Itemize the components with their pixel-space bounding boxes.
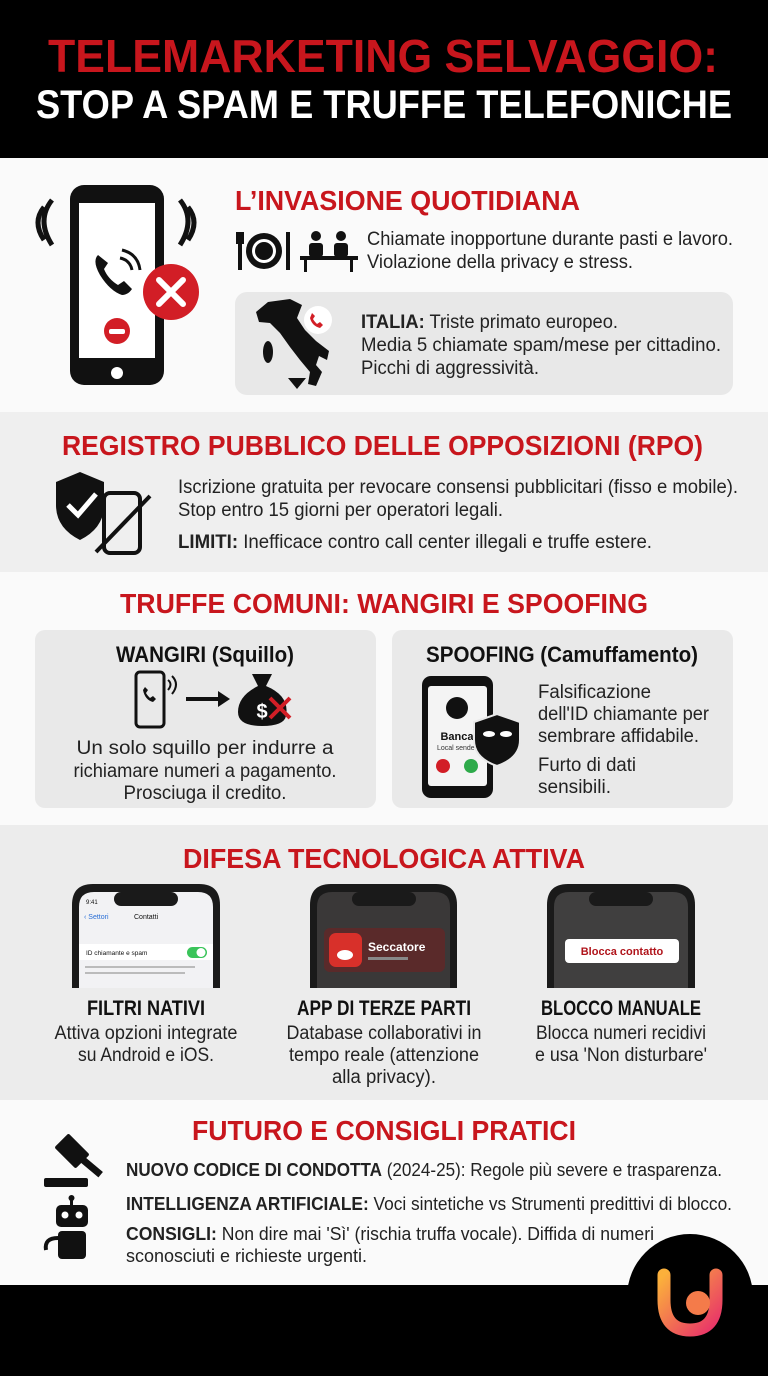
text: app terze parti [286, 997, 482, 1088]
callout: italia: Picchi di aggressività. [361, 358, 539, 379]
panel: futuro e consigli: CONSIGLI: Non dire mai 'Sì' (rischia truffa vocale). Diffida di numeri [126, 1224, 654, 1244]
card: spoofing: Furto di dati [538, 755, 636, 776]
text: futuro: NUOVO CODICE DI CONDOTTA (2024-25): Regole più severe e trasparenza. [126, 1160, 722, 1180]
text: filtri nativi [54, 997, 238, 1066]
icon: dinner and work [236, 231, 358, 272]
phone: blocco manuale: Blocca contatto [581, 946, 664, 958]
text: blocco manuale: BLOCCO MANUALE [541, 997, 701, 1020]
text: app terze parti: tempo reale (attenzione [289, 1045, 479, 1066]
card: wangiri: richiamare numeri a pagamento. [74, 761, 336, 782]
text: blocco manuale: e usa 'Non disturbare' [535, 1045, 707, 1066]
heading: L’INVASIONE QUOTIDIANA [235, 185, 580, 216]
text: filtri nativi: FILTRI NATIVI [87, 997, 205, 1020]
card: wangiri: $ [256, 701, 268, 723]
panel: futuro e consigli: INTELLIGENZA ARTIFICIALE: Voci sintetiche vs Strumenti predittivi di blocco. [126, 1194, 732, 1214]
card: wangiri [35, 630, 376, 808]
text: chiamate: Chiamate inopportune durante pasti e lavoro. [367, 229, 733, 250]
card: spoofing: SPOOFING (Camuffamento) [426, 642, 698, 667]
text: filtri nativi: Attiva opzioni integrate [54, 1023, 238, 1044]
card: spoofing: dell'ID chiamante per [538, 704, 710, 725]
panel: invasione quotidiana [0, 158, 768, 412]
panel: RPO [0, 412, 768, 572]
text: RPO: Iscrizione gratuita per revocare consensi pubblicitari (fisso e mobile). [178, 477, 738, 498]
phone: filtri nativi: 9:41 [86, 900, 98, 906]
icon: ringing phone [38, 185, 199, 385]
card: wangiri: Un solo squillo per indurre a [76, 738, 334, 759]
text: app terze parti: alla privacy). [332, 1067, 436, 1088]
card: spoofing: sensibili. [538, 777, 611, 798]
callout: italia [235, 292, 733, 395]
icon: gavel [44, 1133, 103, 1187]
heading: REGISTRO PUBBLICO DELLE OPPOSIZIONI (RPO) [62, 430, 703, 461]
panel: RPO: LIMITI: Inefficace contro call center illegali e truffe estere. [178, 532, 652, 553]
panel: futuro e consigli: sconosciuti e richieste urgenti. [126, 1246, 367, 1266]
phone: filtri nativi: ‹ Settori [84, 914, 109, 921]
callout: italia: Media 5 chiamate spam/mese per cittadino. [361, 335, 721, 356]
panel: invasione quotidiana: Violazione della privacy e stress. [367, 252, 633, 273]
card: wangiri: WANGIRI (Squillo) [116, 642, 294, 667]
heading: DIFESA TECNOLOGICA ATTIVA [183, 843, 585, 874]
card: spoofing: Banca [440, 731, 474, 743]
footer [0, 1234, 768, 1376]
text: blocco manuale [535, 997, 707, 1066]
text: app terze parti: Database collaborativi in [286, 1023, 482, 1044]
title: TELEMARKETING SELVAGGIO: [48, 30, 718, 82]
card: spoofing [392, 630, 733, 808]
phone: filtri nativi: ID chiamante e spam [86, 950, 147, 957]
icon: logo [664, 1275, 716, 1330]
phone: filtri nativi [72, 884, 220, 988]
phone: app terze parti [310, 884, 457, 988]
icon: shield and crossed phone [56, 472, 150, 553]
card: spoofing: Local sender [437, 745, 478, 752]
card: spoofing: sembrare affidabile. [538, 726, 699, 747]
phone: filtri nativi: Contatti [134, 914, 159, 921]
icon: italy map [256, 299, 329, 389]
text: blocco manuale: Blocca numeri recidivi [536, 1023, 706, 1044]
callout: italia: ITALIA: Triste primato europeo. [361, 312, 618, 333]
text: app terze parti: APP DI TERZE PARTI [297, 997, 471, 1020]
heading: FUTURO E CONSIGLI PRATICI [192, 1115, 576, 1146]
phone: blocco manuale [547, 884, 695, 988]
header [0, 0, 768, 158]
panel: truffe comuni [0, 572, 768, 825]
card: spoofing: Falsificazione [538, 682, 651, 703]
heading: TRUFFE COMUNI: WANGIRI E SPOOFING [120, 588, 648, 619]
icon: robot [46, 1195, 88, 1259]
panel: difesa tecnologica [0, 825, 768, 1100]
phone: app terze parti: Seccatore [368, 940, 426, 954]
card: wangiri: Prosciuga il credito. [124, 783, 286, 804]
panel: RPO: Stop entro 15 giorni per operatori legali. [178, 500, 503, 521]
panel: futuro e consigli [0, 1100, 768, 1285]
text: filtri nativi: su Android e iOS. [78, 1045, 214, 1066]
